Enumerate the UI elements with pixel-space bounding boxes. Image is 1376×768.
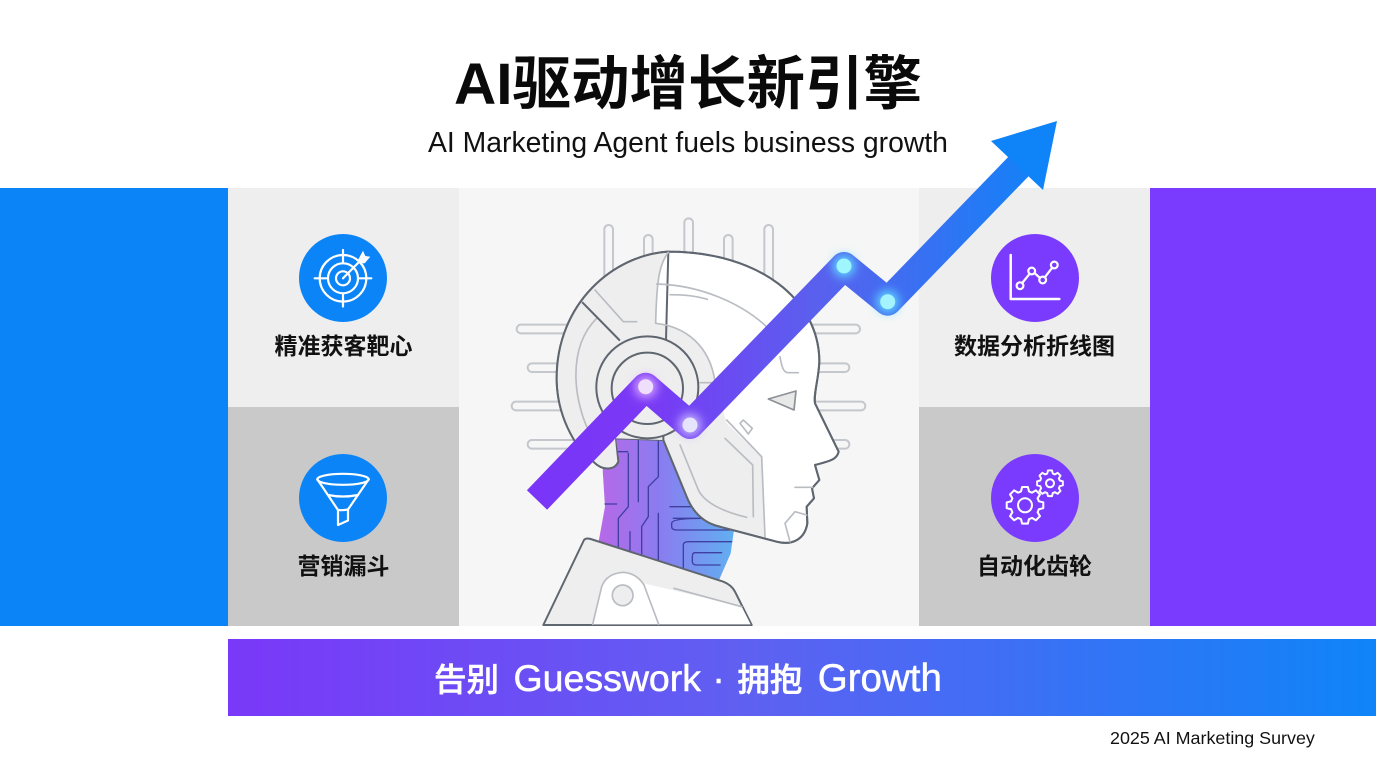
slogan text: 告别 Guesswork · 拥抱 Growth xyxy=(434,657,942,700)
head silhouette xyxy=(557,252,839,543)
title: AI驱动增长新引擎 xyxy=(454,52,922,117)
panel: right purple band xyxy=(1150,188,1376,626)
back of helmet xyxy=(558,252,764,537)
label: automation gears: 自动化齿轮 xyxy=(977,553,1092,579)
panel: automation gears xyxy=(919,407,1150,626)
illustration: robot head xyxy=(512,218,865,625)
head outline redraw xyxy=(557,252,839,543)
eye xyxy=(768,391,796,410)
growth arrow xyxy=(537,121,1057,500)
label: marketing funnel: 营销漏斗 xyxy=(298,553,390,579)
panel: marketing funnel xyxy=(228,407,459,626)
panel: data analysis xyxy=(919,188,1150,407)
icon: funnel xyxy=(299,454,387,542)
label: data analysis: 数据分析折线图 xyxy=(954,333,1115,359)
slogan banner xyxy=(228,639,1376,716)
panel: left blue band xyxy=(0,188,228,626)
panel: precise targeting xyxy=(228,188,459,407)
circuit antennas xyxy=(512,218,865,449)
neck with circuits xyxy=(598,430,734,582)
icon: line chart xyxy=(991,234,1079,322)
icon: target with arrow xyxy=(299,234,387,322)
label: precise targeting: 精准获客靶心 xyxy=(274,333,412,359)
arrowhead xyxy=(991,121,1057,190)
shoulders xyxy=(543,539,752,625)
subtitle: AI Marketing Agent fuels business growth xyxy=(428,127,948,159)
panel: center illustration background xyxy=(459,188,919,626)
source note: 2025 AI Marketing Survey xyxy=(1110,728,1315,748)
icon: gears xyxy=(991,454,1079,542)
face panel lines xyxy=(576,252,813,542)
data point glows xyxy=(635,255,899,436)
ear rings xyxy=(583,290,698,438)
